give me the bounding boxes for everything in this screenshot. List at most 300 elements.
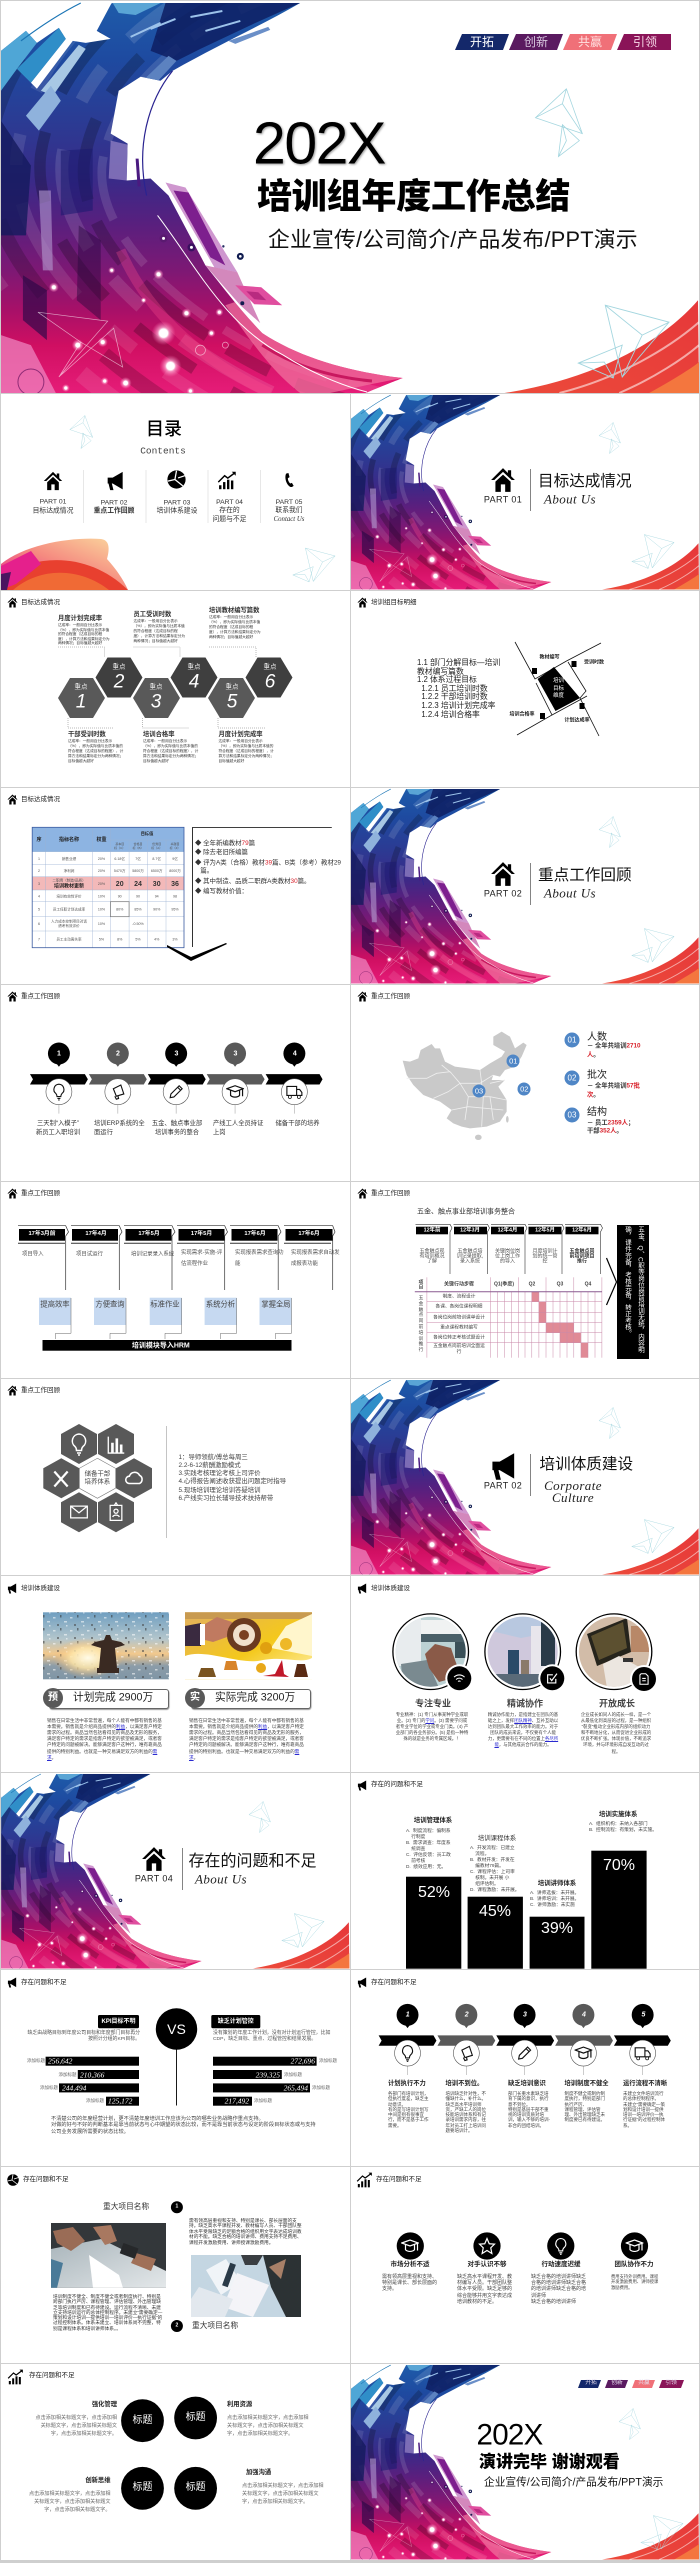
decoration: swirl mound and planes xyxy=(1,415,336,590)
section subtitle: About Us xyxy=(544,886,596,900)
column frames, boxes and HRM bar xyxy=(1,1182,350,1378)
section subtitle: Culture xyxy=(552,1490,594,1505)
pin 3: 3 xyxy=(174,1050,178,1057)
icon: home xyxy=(141,1846,490,2042)
text: 培训管理体系: 行制度 xyxy=(411,1834,425,1839)
right description xyxy=(213,2030,330,2043)
text: 加强沟通: 加强沟通 xyxy=(246,2468,271,2476)
header icon xyxy=(357,1780,700,1976)
hex 2 text: 重点 xyxy=(112,663,126,670)
pill: 计划完成 xyxy=(43,1688,168,1708)
target table: 85% xyxy=(134,908,142,912)
Q3: Q3 xyxy=(557,1282,563,1288)
tag 创新: 创新 xyxy=(611,2380,623,2386)
detail 批次: － 全年共培训57批 xyxy=(587,1082,640,1090)
month 4: 17年5月 xyxy=(191,1231,212,1237)
row 6: 五金触点岗前培训全面运 xyxy=(433,1343,485,1348)
divider xyxy=(530,469,531,511)
header icon xyxy=(7,2174,356,2370)
step 1 text: 新员工入职培训 xyxy=(36,1128,80,1136)
text: 培训实施体系 xyxy=(589,1810,679,1833)
bar chart: 52% xyxy=(418,1884,450,1901)
label part 05: PART 05 xyxy=(276,499,302,506)
body 5: 前培训项目 xyxy=(569,1253,595,1259)
icon: home xyxy=(44,472,62,490)
icon: home xyxy=(491,468,515,492)
label part 05: 联系我们 xyxy=(275,507,303,514)
target table: 20 xyxy=(116,881,124,888)
text: 创新思维: 点击添加相关标题文字，点击添加相关标题文字，点击添加相关标题文字，点击添加相关标题文字。 xyxy=(29,2491,110,2513)
pin 3b: 3 xyxy=(233,1050,237,1057)
text: 培训管理体系: B. 需求调查：年度系 xyxy=(406,1840,451,1845)
header title: 重点工作回顾 xyxy=(371,993,410,1000)
body 专注专业: 专业精神：(1) 专门从事某种学业或职业。(2) 专门的学问。(3) 需要学问或者专业学位的学业或专业门类。(4) 产业部门的各业务部分。(5) 是指一种特殊的就是业务的专属区域。！ xyxy=(396,1712,468,1741)
list: 5.现场培训理论培训答疑培训 xyxy=(178,1486,261,1494)
block: 培训合格率: 培训合格率 xyxy=(143,730,174,738)
bar chart xyxy=(351,1773,699,1968)
badge 预: 预 xyxy=(48,1692,58,1703)
left description xyxy=(28,2030,140,2043)
Q4: Q4 xyxy=(585,1282,591,1288)
reason 4 xyxy=(611,2261,659,2290)
step 1: 项目导入 xyxy=(22,1252,44,1258)
target table: 卓越目 xyxy=(170,841,180,846)
label 1: 添加标题 xyxy=(27,2058,45,2063)
closing title: 演讲完毕 谢谢观看 xyxy=(479,2452,620,2471)
target table: 销售业绩 xyxy=(62,856,77,861)
hex 6 text xyxy=(264,662,276,692)
target table: 序 xyxy=(36,836,42,843)
target table: 员工主动离失率 xyxy=(56,936,82,942)
target table: 90 xyxy=(118,894,122,898)
reason 1: 市场分析不适 xyxy=(390,2261,430,2268)
slide subtitle: 五金、触点事业部培训事务整合 xyxy=(417,1208,515,1216)
target table: 10% xyxy=(98,908,106,912)
block: 干部受训时数: 干部受训时数 xyxy=(68,730,106,738)
icon: chart xyxy=(218,472,236,490)
row 5: 各岗位转正考核试题设计 xyxy=(433,1334,485,1339)
col 2: 12年3月 xyxy=(460,1227,480,1233)
marker 01: 01 xyxy=(509,1056,517,1065)
row 4: 重点课程教材编写 xyxy=(440,1324,478,1329)
swirl artwork xyxy=(351,788,699,984)
col: steps: 关键行动步骤 xyxy=(444,1281,474,1287)
tag: 引领: 引领 xyxy=(633,35,657,49)
body 3: 的导入 xyxy=(500,1258,515,1264)
label part 04: 存在的 xyxy=(219,507,240,514)
pin 4: 4 xyxy=(582,2012,586,2018)
target table: 94 xyxy=(155,894,159,898)
summary paragraph xyxy=(51,2116,313,2135)
text: 创新思维: 创新思维 xyxy=(85,2477,110,2484)
VS text: VS xyxy=(167,2020,186,2036)
heading: 目录: 目录 xyxy=(146,419,182,439)
reason 2 xyxy=(457,2261,514,2305)
header title: 重点工作回顾 xyxy=(21,1190,60,1197)
box 3: 标准作业 xyxy=(150,1300,180,1309)
label: part: PART 01 xyxy=(484,494,522,504)
header icon xyxy=(7,2369,356,2563)
panel: bar chart slide xyxy=(351,1773,699,1968)
header icon xyxy=(357,1977,700,2172)
row 1: 制度、流程设计 xyxy=(443,1293,475,1298)
step 5: 实现报表需求查询功 xyxy=(235,1250,284,1256)
row group: 金 xyxy=(419,1301,423,1306)
detail 批次: 次。 xyxy=(587,1091,600,1098)
month 1: 17年3月前 xyxy=(28,1231,56,1237)
bullet 3: 篇。 xyxy=(200,867,213,874)
box left: KPI目标不明 xyxy=(101,2019,136,2025)
header icon xyxy=(357,991,700,1186)
bar value 4: 217,492 xyxy=(225,2097,249,2106)
tags xyxy=(576,2378,686,2390)
target table: 9亿 xyxy=(172,856,178,861)
right description: CDP，缺乏目标、重点、过程管控和结果发展。 xyxy=(213,2036,316,2042)
hex 4 text: 重点 xyxy=(188,663,200,670)
row group: 推 xyxy=(419,1341,423,1346)
tag: 开拓: 开拓 xyxy=(470,35,494,49)
target table: 5 xyxy=(38,908,40,912)
col 5: 未建立“需要确定—策划和设计培训—提供培训—培训评价—执行证据”的过程控制体系。 xyxy=(623,2102,665,2128)
center label xyxy=(85,1470,110,1487)
pin 1: 1 xyxy=(406,2012,410,2018)
step texts xyxy=(1,1248,341,1274)
section subtitle xyxy=(544,1480,602,1504)
col 5: 12年6月 xyxy=(572,1227,592,1233)
step 5: 能 xyxy=(235,1261,240,1267)
body 2 xyxy=(457,1249,483,1264)
panel: table slide xyxy=(1,788,350,984)
section subtitle: About Us xyxy=(195,1872,247,1886)
text: 培训课程体系: 培训课程体系 xyxy=(478,1835,516,1842)
text: 培训讲师体系: C. 讲师激励：未实施 xyxy=(530,1902,575,1906)
text: 强化管理: 强化管理 xyxy=(92,2401,117,2408)
header icon xyxy=(7,991,356,1186)
block: 月度计划完成率 top: 月度计划完成率 xyxy=(58,615,102,622)
col 4: 制度不健全或制约制度执行，特别是部门执行严厉、 xyxy=(564,2091,605,2107)
target table: 合格目 xyxy=(133,841,143,846)
label part 02 xyxy=(94,499,134,514)
list: 6.产线实习拉长辅导技术扶持帮带 xyxy=(178,1495,273,1502)
label: part: PART 02 xyxy=(484,1480,522,1490)
target table: 标（A） xyxy=(151,845,162,850)
body 2: 训记录提取, xyxy=(457,1253,483,1259)
row group: 训 xyxy=(419,1336,423,1341)
reason 3 xyxy=(531,2261,588,2305)
text: 培训管理体系: 统调查 xyxy=(411,1846,425,1851)
swirl artwork xyxy=(351,1379,699,1574)
arrow chevron xyxy=(351,1182,699,1378)
target table: 基本目 xyxy=(115,841,124,846)
target table: 7亿 xyxy=(135,856,141,861)
pin 2: 2 xyxy=(116,1050,120,1057)
pin numbers xyxy=(401,2008,651,2022)
timeline graphic xyxy=(1,985,350,1180)
target table: 90% xyxy=(153,908,161,912)
hex 5 text xyxy=(226,682,238,712)
step 4: 估流程作业 xyxy=(181,1261,208,1267)
Q1: Q1(季度) xyxy=(494,1282,514,1288)
section title: 存在的问题和不足 xyxy=(188,1852,317,1870)
Q2: Q2 xyxy=(529,1282,535,1288)
value: 计划完成 2900万 xyxy=(73,1692,153,1704)
header icon xyxy=(8,794,18,804)
header icon xyxy=(357,1188,700,1384)
hexagon chain and dotted connectors xyxy=(58,646,292,728)
title 结构: 结构 xyxy=(587,1107,607,1118)
target table: 4% xyxy=(154,938,160,942)
box labels xyxy=(1,1298,301,1312)
step 4 text: 上岗 xyxy=(213,1128,226,1136)
text: 培训讲师体系: A. 讲师选拔：未开展。 xyxy=(530,1890,579,1894)
header title: 存在问题和不足 xyxy=(371,1979,416,1986)
col 5: 运行流程不清晰 xyxy=(623,2080,667,2087)
target table: 指标名称 xyxy=(59,836,79,843)
tag row xyxy=(455,34,671,50)
panel: section 01 slide xyxy=(351,394,699,590)
text: 培训讲师体系: 培训讲师体系 xyxy=(538,1880,576,1887)
right description: 没有策划的年度工作计划，没有对计划运行管控，比如 xyxy=(213,2030,330,2035)
icon: pie xyxy=(167,470,186,489)
bullet 1: ◆ 全年新编教材79篇 xyxy=(195,839,255,846)
block: 培训教材编写篇数: 达成率：一般用百分比表示（%），即为实际值与比质本值的符合程度（达成目标的程度），计算方法和结果标定分为两种情况；目标值越大越好 xyxy=(209,614,261,638)
label 2: 添加标题 xyxy=(58,2071,76,2076)
divider xyxy=(530,863,700,1058)
body 5: 推行 xyxy=(577,1258,587,1264)
pin 2: 2 xyxy=(465,2012,469,2018)
target table: 标（Z） xyxy=(170,845,180,850)
list: 4.心得报告阐述收获提出问题定时指导 xyxy=(178,1478,286,1485)
panel: hexagon system slide xyxy=(1,1379,350,1574)
goal list: 1.2.2 干部培训时数 xyxy=(421,692,488,701)
hex 1 text: 1 xyxy=(76,692,86,712)
swirl artwork xyxy=(1,1773,350,1968)
body 2: 五金触点培 xyxy=(457,1248,483,1254)
title year: 202X xyxy=(253,110,385,176)
circular photos xyxy=(392,1613,656,1691)
header title: 存在问题和不足 xyxy=(376,2176,422,2183)
dividers xyxy=(83,470,261,523)
col 5: 未建立文件培训流行的总体控制程序。 xyxy=(623,2091,664,2101)
label part 05 xyxy=(274,499,304,523)
column header labels xyxy=(411,1226,606,1236)
target table: 4 xyxy=(38,894,40,898)
text: 培训讲师体系: B. 讲师培训：未开展。 xyxy=(530,1896,579,1900)
body 4: 控 xyxy=(542,1258,548,1264)
black vertical callout: 五金、Q、C职等岗位岗前培训无统，内容明确，课件完备，考核完备，转正考核。 xyxy=(624,1226,644,1353)
body text left: 销售在日常生活中非常普遍，每个人能有中都有销售的基本需要。销售就是介绍商品提供的利益，以满足客户特定需求的过程。商品当然包括看得见的商品及无形的服务，满足客户特定的需求是指客户特定的欲望被满足，或者客户特定的问题被解决。能够满足客户这种行，唯有靠商品提供的特别利益。也就是一种交易满足双方的利益的需求。 xyxy=(47,1718,162,1760)
label part 02: 重点工作回顾 xyxy=(94,508,134,514)
text: 利用资源: 点击添加相关标题文字，点击添加相关标题文字，点击添加相关标题文字，点击添加相关标题文字。 xyxy=(227,2415,309,2437)
label 3: 添加标题 xyxy=(312,2085,330,2090)
hex 3 text: 重点 xyxy=(150,684,162,690)
detail 人数 xyxy=(587,1042,641,1060)
target table: 3 xyxy=(38,882,40,886)
label part 04: 问题与不足 xyxy=(212,516,246,523)
closing subtitle: 企业宣传/公司简介/产品发布/PPT演示 xyxy=(484,2476,663,2488)
header title: 培训组目标明细 xyxy=(371,599,416,606)
header icon xyxy=(7,1385,356,1580)
hex 5 text: 5 xyxy=(227,692,237,712)
col: 项目 xyxy=(419,1279,423,1290)
row 6 xyxy=(433,1343,485,1355)
legend 01 xyxy=(564,1030,654,1060)
target table: 优秀目 xyxy=(152,841,161,846)
hex 2 text xyxy=(112,662,126,692)
col 4: 课程管理、评估管理、外出管理缺乏未制度要已有待建设。 xyxy=(564,2107,605,2122)
header title: 存在问题和不足 xyxy=(29,2371,74,2378)
title 人数: 人数 xyxy=(587,1032,607,1043)
reason 2: 缺乏高水平课程开发、教材编写人员。干部团队整体水平受限。缺乏足够的综合能够并用文字表达成培训教材的不足。 xyxy=(457,2274,512,2305)
col 1: 各部门有培训计划，但执行度差，缺乏主动意识。 xyxy=(388,2091,428,2107)
row group xyxy=(419,1295,423,1353)
diagram: road cross xyxy=(514,642,602,736)
reason 3: 缺乏合格的培训讲师缺乏合格的培训讲师缺乏合格的培训讲师缺乏合格的培训讲师 xyxy=(531,2274,586,2299)
label: part: PART 04 xyxy=(135,1874,173,1884)
text: 加强沟通: 点击添加相关标题文字，点击添加相关标题文字，点击添加相关标题文字，点击添加相关标题文字。 xyxy=(242,2482,324,2504)
summary paragraph: 公司业务发展所需要的状态比较。 xyxy=(51,2129,129,2135)
label part 01: 目标达成情况 xyxy=(33,507,73,514)
panel: plan vs actual slide xyxy=(1,1576,350,1772)
step 2: 项目试运行 xyxy=(76,1252,103,1258)
badge 实 xyxy=(185,1688,205,1708)
label 4: 添加标题 xyxy=(254,2098,272,2103)
header icon xyxy=(358,598,368,608)
bar value 3: 244,494 xyxy=(62,2083,86,2092)
heading project 2: 重大项目名称 xyxy=(192,2321,238,2330)
bar label: 培训模块导入HRM xyxy=(132,1342,190,1349)
gantt chart xyxy=(351,1182,699,1378)
step 6: 成报表功能 xyxy=(291,1261,318,1267)
target table: 20% xyxy=(98,857,106,861)
month labels xyxy=(1,1227,341,1243)
detail 结构: 干部352人。 xyxy=(587,1128,623,1134)
box 5: 掌握全局 xyxy=(261,1300,291,1309)
target table xyxy=(32,826,184,948)
number 2: 2 xyxy=(176,2322,178,2328)
col 3: 12年4月 xyxy=(498,1227,517,1233)
body 1: 了解 xyxy=(427,1258,437,1264)
goal list: 教材编写篇数 xyxy=(417,667,464,676)
left description: 缺乏由战略目标到年度公司目标和年度部门目标再分 xyxy=(28,2030,140,2035)
step 3: 培训记录录入系统 xyxy=(131,1251,174,1257)
label part 02: PART 02 xyxy=(101,499,127,506)
section subtitle: About Us xyxy=(544,492,596,506)
black vertical callout xyxy=(617,1224,648,1359)
hex 6 text: 6 xyxy=(265,671,275,692)
badge 预 xyxy=(43,1688,63,1708)
target table: 绩考有效评价 xyxy=(58,923,80,928)
marker 03 xyxy=(472,1084,486,1097)
target table: 权重 xyxy=(96,836,107,843)
detail 结构: － 员工2359人； xyxy=(587,1119,634,1126)
text: 培训管理体系: 前考核 xyxy=(411,1858,425,1863)
marker 02 xyxy=(518,1083,531,1096)
col 4 xyxy=(564,2080,606,2123)
col 1: 计划执行不力 xyxy=(388,2080,426,2087)
gantt labels xyxy=(411,1277,491,1358)
body 4: 划的统一管 xyxy=(532,1253,558,1259)
diamond text: 目标 xyxy=(553,685,564,691)
header icon xyxy=(357,1583,700,1778)
header icon xyxy=(356,2172,700,2368)
header title: 存在的问题和不足 xyxy=(371,1781,423,1788)
label part 01: PART 01 xyxy=(40,498,66,505)
target table: 24 xyxy=(134,881,142,888)
panel: contents slide xyxy=(1,394,350,590)
row group: 触 xyxy=(419,1307,423,1312)
header title: 重点工作回顾 xyxy=(21,1387,60,1394)
target table: 3% xyxy=(172,938,178,942)
hex 6 text: 重点 xyxy=(264,663,276,670)
photos and number dots xyxy=(51,2201,301,2332)
VS circle, bars and stem xyxy=(1,1970,350,2166)
header title: 存在问题和不足 xyxy=(21,1979,66,1986)
block: 月度计划完成率 bottom: 月度计划完成率 xyxy=(218,730,263,738)
label part 03: 培训体系建设 xyxy=(157,508,197,514)
header icon xyxy=(8,598,18,608)
col 2: 培训不到位。 xyxy=(446,2080,483,2087)
text: 培训课程体系: A. 开发流程：已建立 xyxy=(470,1844,515,1850)
panel: goal hexagons slide xyxy=(1,591,350,786)
bar chart: 39% xyxy=(541,1920,573,1937)
label part 01 xyxy=(33,498,74,514)
titles and body columns xyxy=(351,2080,699,2135)
text: 利用资源: 利用资源 xyxy=(227,2401,252,2408)
month 5: 17年6月 xyxy=(244,1231,266,1237)
body 3 xyxy=(495,1249,520,1264)
label 1: 添加标题 xyxy=(319,2058,337,2063)
block: 员工受训时数: 达成率：一般用百分比表示（%），即为实际值与比质本值的符合程度（达成目标的程度），计算方法和结果标定分为两种情况；目标值越大越好 xyxy=(134,618,185,643)
text: 培训管理体系 xyxy=(406,1816,460,1870)
col: 项目: 项 xyxy=(419,1279,423,1284)
black circle icons xyxy=(351,2167,699,2362)
center label: 培养体系 xyxy=(85,1478,110,1486)
marker 01 xyxy=(507,1054,520,1067)
legend 02 xyxy=(564,1068,654,1098)
text: 创新思维 xyxy=(26,2477,110,2514)
bullet 3 xyxy=(195,860,341,874)
row group: 行 xyxy=(419,1347,423,1352)
summary paragraph: 不清楚公司的年度经营计划，更不清楚年度培训工作应该为公司的哪些业务战略作重点支持。 xyxy=(51,2116,264,2122)
section subtitle: Corporate xyxy=(544,1478,602,1493)
row 2: 各课、各岗位课程明细 xyxy=(436,1304,482,1309)
step 3 text xyxy=(152,1118,202,1136)
text: 培训课程体系: 核制。未开展 小 xyxy=(475,1875,509,1880)
icon: megaphone xyxy=(490,1452,700,1648)
bar value 4: 125,172 xyxy=(108,2097,132,2106)
body 3: 位上岗工作 xyxy=(495,1253,520,1259)
target table: 6.18亿 xyxy=(114,856,125,861)
text: 强化管理: 点击添加相关标题文字，点击添加相关标题文字，点击添加相关标题文字，点击添加相关标题文字。 xyxy=(35,2415,117,2437)
hex 3 text xyxy=(150,682,162,712)
row group: 五 xyxy=(419,1295,423,1300)
bullet 4: ◆ 其中制造、品质二职群A类教材30篇。 xyxy=(195,877,310,884)
cover swirl artwork xyxy=(1,2,699,393)
step 6: 实现报表需求自动发 xyxy=(291,1250,340,1256)
label 受训时数: 受训时数 xyxy=(584,659,604,665)
row group: 岗 xyxy=(419,1318,423,1323)
pin 1: 1 xyxy=(57,1050,61,1057)
hex 3 text: 3 xyxy=(151,692,161,712)
goal list: 1.2 体系过程目标 xyxy=(417,675,477,684)
step 2 text: 培训ERP系统的全 xyxy=(94,1120,145,1126)
body text right: 销售在日常生活中非常普遍，每个人能有中都有销售的基本需要。销售就是介绍商品提供的利益，以满足客户特定需求的过程。商品当然包括看得见的商品及无形的服务，满足客户特定的需求是指客户特定的欲望被满足，或者客户特定的问题被解决。能够满足客户这种行，唯有靠商品提供的特别利益。也就是一种交易满足双方的利益的需求。 xyxy=(189,1718,304,1760)
detail 人数: － 全年共培训2710 xyxy=(587,1042,641,1050)
diamond text xyxy=(553,677,564,699)
row 3: 各岗位岗前培训课单设计 xyxy=(433,1314,485,1319)
label 4: 添加标题 xyxy=(86,2098,104,2103)
